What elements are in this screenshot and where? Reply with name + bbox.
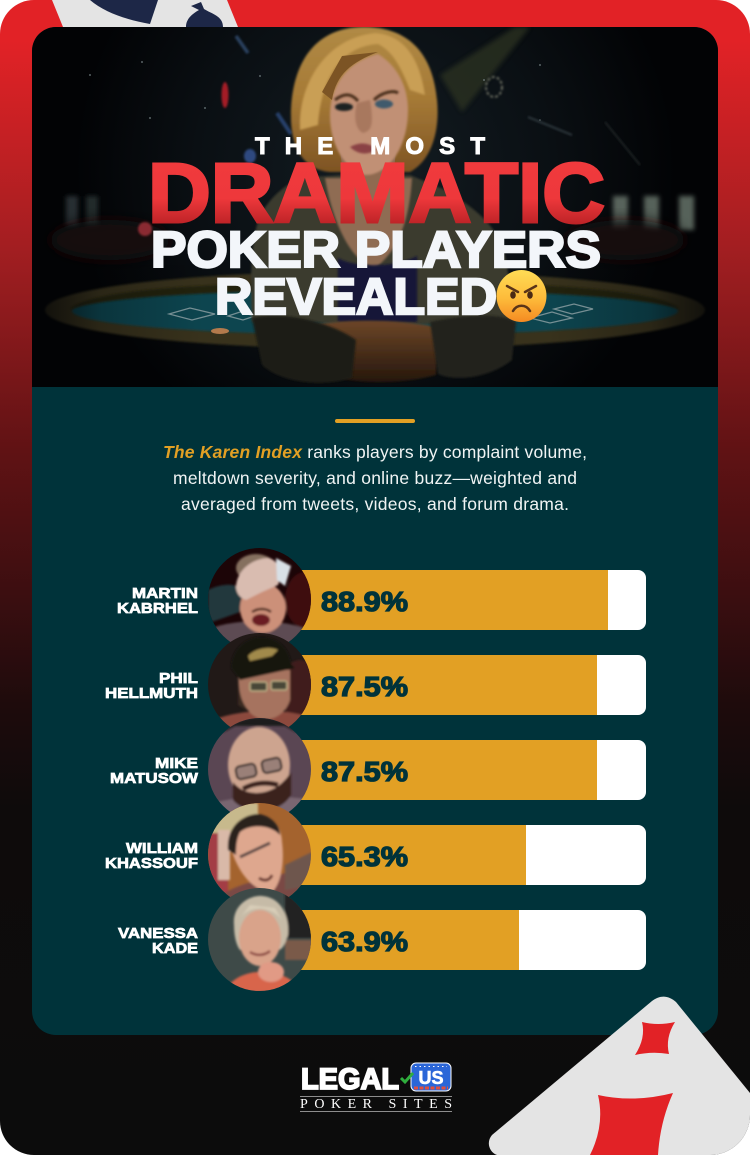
portrait: Phil Hellmuth xyxy=(208,633,311,727)
neck xyxy=(340,154,396,180)
row: William Khassouf bar xyxy=(280,825,646,885)
player names: PHIL xyxy=(159,670,198,687)
player names xyxy=(105,585,199,957)
portrait: Mike Matusow xyxy=(208,718,311,812)
intro text: averaged from tweets, videos, and forum drama. xyxy=(181,494,569,514)
woman xyxy=(251,27,516,383)
icon: small red diamond xyxy=(635,1022,675,1055)
eyes and brows xyxy=(335,92,398,153)
icon: green check xyxy=(401,1073,413,1082)
player names: MATUSOW xyxy=(110,770,199,787)
hair back xyxy=(291,27,438,172)
title line: revealed: REVEALED xyxy=(215,268,497,325)
player names: HELLMUTH xyxy=(105,685,198,702)
face xyxy=(330,54,408,175)
value labels xyxy=(321,586,408,957)
title line: poker players: POKER PLAYERS xyxy=(151,221,601,278)
background crowd and screens xyxy=(66,196,694,230)
value labels: 88.9% xyxy=(321,586,408,617)
player names: VANESSA xyxy=(118,925,198,942)
player names: MARTIN xyxy=(132,585,198,602)
logo wordmark: legal: LEGAL xyxy=(301,1063,399,1096)
portrait: William Khassouf xyxy=(208,803,311,897)
row: Vanessa Kade bar xyxy=(280,910,646,970)
bar chart: Karen Index ranking xyxy=(105,548,646,992)
hero image: angry woman at poker table xyxy=(32,27,718,387)
intro text xyxy=(163,442,587,514)
left sleeve xyxy=(252,316,356,383)
poker table xyxy=(46,273,705,348)
title xyxy=(148,133,605,325)
player names: KHASSOUF xyxy=(105,855,198,872)
portrait: Vanessa Kade xyxy=(208,888,315,992)
player names: KADE xyxy=(152,940,198,957)
player names: MIKE xyxy=(155,755,198,772)
logo badge: US xyxy=(411,1063,451,1091)
icon: large red diamond xyxy=(590,1093,673,1155)
right sleeve xyxy=(430,316,516,378)
logo badge: US: US xyxy=(418,1068,444,1088)
top-left spade playing card xyxy=(52,0,238,27)
divider accent xyxy=(335,419,415,423)
logo: Legal US Poker Sites xyxy=(300,1063,452,1112)
chest skin xyxy=(325,178,412,268)
main teal panel xyxy=(32,27,718,1035)
jacket xyxy=(251,175,514,325)
row: Martin Kabrhel bar xyxy=(280,570,646,630)
value labels: 63.9% xyxy=(321,926,408,957)
value labels: 87.5% xyxy=(321,756,408,787)
intro text: The Karen Index ranks players by complaint volume, xyxy=(163,442,587,462)
value labels: 65.3% xyxy=(321,841,408,872)
forearm skin xyxy=(312,321,440,382)
value labels: 87.5% xyxy=(321,671,408,702)
player names: WILLIAM xyxy=(126,840,198,857)
star specks xyxy=(89,61,541,121)
purple top xyxy=(338,256,417,322)
portrait: Martin Kabrhel xyxy=(208,548,311,642)
icon: angry face emoji xyxy=(496,270,546,322)
intro text: meltdown severity, and online buzz—weighted and xyxy=(173,468,577,488)
title line: dramatic: DRAMATIC xyxy=(148,146,605,240)
row: Mike Matusow bar xyxy=(280,740,646,800)
title line: the most: THE MOST xyxy=(255,133,485,160)
row: Phil Hellmuth bar xyxy=(280,655,646,715)
bottom-right diamond playing card xyxy=(489,997,750,1155)
poker chips xyxy=(138,36,640,236)
logo subtitle: POKER SITES xyxy=(300,1097,452,1112)
hair fringe xyxy=(300,33,425,130)
player names: KABRHEL xyxy=(117,600,198,617)
